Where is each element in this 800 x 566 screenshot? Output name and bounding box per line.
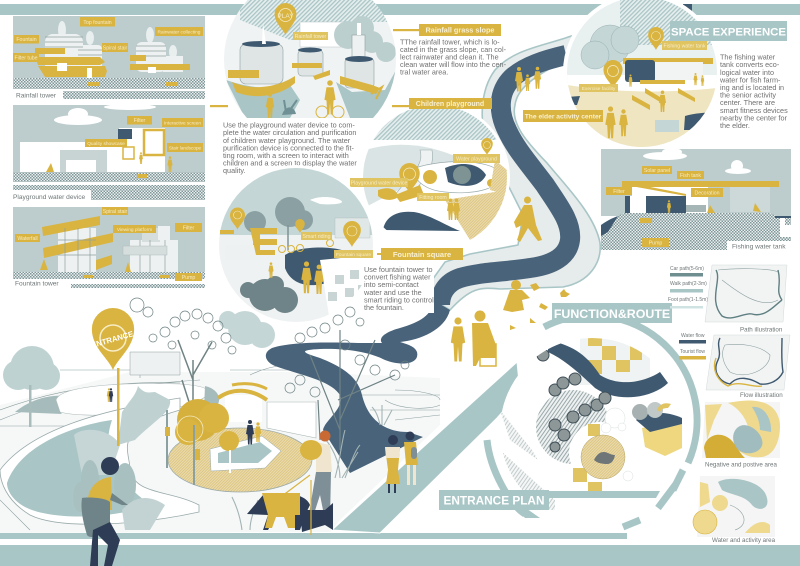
text: elder description: tank converts eco- xyxy=(720,60,780,69)
map: path illustration: Path illustration xyxy=(740,326,783,334)
text: fountain description: smart riding to control xyxy=(364,296,434,304)
label: Waterfall xyxy=(15,234,40,242)
woman with dogs xyxy=(247,430,333,535)
label: Fountain square: Fountain square xyxy=(336,252,371,258)
label: Filter: Filter xyxy=(183,226,195,232)
bottom banner xyxy=(0,533,800,566)
label: Water playground xyxy=(453,154,500,163)
label: The elder activity center xyxy=(523,110,603,122)
pond and curved rim xyxy=(0,398,199,524)
label: Viewing platform: Viewing platform xyxy=(117,227,152,233)
outer ring xyxy=(487,315,697,527)
map: negative and positive area xyxy=(702,400,780,468)
map: flow illustration xyxy=(706,335,790,399)
label: Water playground: Water playground xyxy=(456,156,497,162)
label: Filter: Filter xyxy=(134,118,146,124)
dark pond xyxy=(15,396,65,414)
text: elder description: center. There are xyxy=(720,98,775,107)
map: path illustration xyxy=(705,265,787,334)
heading: Fountain square: Fountain square xyxy=(393,250,451,259)
heading: SPACE EXPERIENCE: SPACE EXPERIENCE xyxy=(671,26,786,38)
label: Filter xyxy=(606,187,632,195)
label: Exercise facility: Exercise facility xyxy=(582,86,616,92)
label: Filter: Filter xyxy=(613,189,625,195)
panel: playground water device section xyxy=(13,104,205,201)
cloud xyxy=(54,104,156,125)
panel: fishing water tank section xyxy=(601,148,791,250)
text: fountain description: the fountain. xyxy=(364,303,404,312)
teal shrub xyxy=(74,430,120,475)
label: Solar panel: Solar panel xyxy=(644,168,670,174)
label: Decoration: Decoration xyxy=(694,190,720,196)
legend: flow types: Tourist flow xyxy=(680,349,705,355)
label: Spiral stair: Spiral stair xyxy=(103,209,128,215)
balloon middle xyxy=(295,219,305,233)
legend: path types xyxy=(668,266,708,308)
map: flow illustration: Flow illustration xyxy=(740,392,783,399)
label: Smart riding: Smart riding xyxy=(303,234,331,240)
PLAY balloon: PLAY xyxy=(277,13,294,20)
legend: path types: Car path(5-6m) xyxy=(670,266,704,272)
text: elder description: ing and is located in xyxy=(720,83,784,92)
label: Fountain xyxy=(14,35,39,44)
leaves near balloon xyxy=(118,386,170,445)
heading: Children playground: Children playground xyxy=(416,101,484,108)
text: elder description xyxy=(719,52,788,130)
map: water and activity area: Water and activity area xyxy=(712,537,776,544)
entrance balloon: ENTRANCE xyxy=(90,329,134,350)
stub line xyxy=(210,105,228,107)
heading: Rainfall grass slope xyxy=(393,24,501,36)
heading: FUNCTION&ROUTE: FUNCTION&ROUTE xyxy=(554,307,670,321)
tower drawing xyxy=(35,21,190,86)
caption: Rainfall tower xyxy=(16,92,57,100)
label: Filter tube xyxy=(13,53,39,62)
heading: ENTRANCE PLAN xyxy=(439,490,549,510)
text: elder description: nearby the center for xyxy=(720,114,787,122)
label: Fitting room: Fitting room xyxy=(419,195,447,201)
foreground man xyxy=(81,457,128,566)
label: Spiral stair xyxy=(102,43,128,52)
label: Fishing water tank xyxy=(662,41,707,50)
text: rainfall description: TThe rainfall tower, which is lo- xyxy=(400,38,500,46)
PLAY balloon xyxy=(275,3,296,35)
label: Exercise facility xyxy=(579,84,618,92)
fish balloon xyxy=(648,27,664,50)
text: playground description: purification device is connected to the fit- xyxy=(223,144,355,152)
panel: entrance plan xyxy=(439,315,697,527)
exercise balloon xyxy=(603,60,623,88)
label: Fishing water tank: Fishing water tank xyxy=(663,44,706,50)
heading: ENTRANCE PLAN: ENTRANCE PLAN xyxy=(444,493,544,507)
label: Stair landscope: Stair landscope xyxy=(169,146,202,150)
label: The elder activity center: The elder activity center xyxy=(525,114,602,120)
label: Top fountain: Top fountain xyxy=(83,20,112,26)
label: Spiral stair: Spiral stair xyxy=(103,46,128,52)
text: elder description: the senior activity xyxy=(720,90,776,100)
label: Fountain: Fountain xyxy=(16,37,37,43)
text: elder description: logical water into xyxy=(720,68,774,77)
panel: rainfall grass slope circle xyxy=(224,0,396,122)
text: elder description: water for fish farm- xyxy=(719,76,781,84)
label: Solar panel xyxy=(642,166,672,174)
label: Rainwater collecting xyxy=(155,27,203,36)
gold blobs and lamps xyxy=(165,399,239,485)
gold family group xyxy=(451,280,570,366)
balloon right xyxy=(343,221,361,247)
scene backdrop sketch xyxy=(0,352,440,533)
text: fountain description xyxy=(362,265,434,313)
navy bridge xyxy=(266,300,450,473)
text: playground description: of children water playground. The water xyxy=(223,136,351,145)
text: elder description: The fishing water xyxy=(720,52,776,62)
small balloon xyxy=(481,138,493,155)
label: Fish tank: Fish tank xyxy=(680,173,701,179)
balloon left xyxy=(230,208,245,230)
text: rainfall description: clean water will flow into the cen- xyxy=(400,60,507,69)
panel: rainfall tower section xyxy=(13,16,205,100)
map: water and activity area xyxy=(693,476,776,544)
mound hatch xyxy=(601,213,780,237)
text: rainfall description: cated in the grass slope, can col- xyxy=(400,45,507,54)
panel: children playground circle xyxy=(350,109,510,240)
label: Interactive screen: Interactive screen xyxy=(164,120,201,126)
label: Pump xyxy=(175,273,202,281)
label: Pump xyxy=(642,238,669,247)
label: Pump: Pump xyxy=(182,275,195,281)
label: Decoration xyxy=(691,188,723,197)
legend: path types: Foot path(1-1.5m) xyxy=(668,297,708,303)
label: Rainfall tower xyxy=(293,32,328,40)
top banner xyxy=(0,4,800,15)
text: fountain description: convert fishing water xyxy=(364,272,431,282)
label: Rainfall tower: Rainfall tower xyxy=(295,34,326,40)
panel: entrance scene xyxy=(0,298,520,566)
heading: FUNCTION&ROUTE xyxy=(552,303,672,323)
label: Fitting room xyxy=(417,193,449,201)
reed plants xyxy=(232,405,392,530)
legend: flow types xyxy=(679,333,706,360)
label stub xyxy=(220,230,234,234)
map: negative and positive area: Negative and postive area xyxy=(705,462,777,468)
label: Quality showcase xyxy=(85,139,127,147)
label: Top fountain xyxy=(80,17,115,26)
clouds xyxy=(643,148,751,174)
label: Viewing platform xyxy=(113,225,156,233)
text: rainfall description: lect rainwater and clean it. The xyxy=(400,52,499,62)
teal trees xyxy=(3,311,275,427)
foreground leaves xyxy=(73,460,165,530)
text: fountain description: into semi-contact xyxy=(364,280,419,289)
plan spoke xyxy=(549,491,660,498)
plan contents xyxy=(500,336,684,522)
label: Playground water device xyxy=(350,178,408,187)
label: Rainwater collecting: Rainwater collecting xyxy=(158,30,201,36)
text: rainfall description: tral water area. xyxy=(400,68,448,76)
text: fountain description: Use fountain tower to xyxy=(364,265,433,274)
building xyxy=(20,128,173,178)
text: playground description: children and a screen to display the water xyxy=(223,158,357,168)
caption: Fishing water tank xyxy=(732,244,786,250)
caption xyxy=(13,279,71,288)
label: Pump: Pump xyxy=(649,240,662,246)
caption: Playground water device xyxy=(13,194,86,201)
text: playground description: quality. xyxy=(223,166,245,175)
tank building xyxy=(622,181,779,216)
label: Playground water device: Playground water device xyxy=(351,180,408,186)
text: playground description: Use the playground water device to com- xyxy=(223,120,355,130)
text: rainfall description xyxy=(400,38,507,76)
heading: Rainfall grass slope: Rainfall grass slope xyxy=(426,25,494,34)
text: playground description: ting room, with a screen to interact with xyxy=(223,151,349,160)
label: Filter tube: Filter tube xyxy=(14,56,38,62)
outline tree xyxy=(130,298,236,405)
label: Stair landscope xyxy=(167,143,203,152)
gold arch xyxy=(218,384,267,400)
bridge tree outlines xyxy=(285,307,409,450)
plaza disc xyxy=(168,428,312,492)
pair on plaza xyxy=(246,420,261,444)
text: playground description xyxy=(223,120,357,175)
label: Waterfall: Waterfall xyxy=(17,236,38,242)
walking couple xyxy=(385,432,418,493)
label: Filter xyxy=(127,116,152,124)
legend: flow types: Water flow xyxy=(681,333,705,339)
legend: path types: Walk path(2-3m) xyxy=(670,281,707,287)
text: elder description: smart fitness devices xyxy=(720,106,788,115)
text: fountain description: water and use the xyxy=(363,288,422,297)
heading: Children playground xyxy=(392,98,492,109)
label: Fountain square xyxy=(334,250,373,258)
panel: fountain tower section xyxy=(13,207,205,288)
heading: SPACE EXPERIENCE xyxy=(670,21,787,41)
entrance balloon xyxy=(90,308,134,446)
small couple xyxy=(107,388,113,402)
text: elder description: the elder. xyxy=(720,121,750,130)
caption: Fountain tower xyxy=(15,280,59,288)
text: playground description: plete the water circulation and purification xyxy=(223,128,356,137)
panel: fountain square circle xyxy=(216,165,376,325)
heading: Fountain square xyxy=(377,248,463,260)
label: Interactive screen xyxy=(162,118,203,127)
teal walkway xyxy=(332,362,520,533)
gold figures on road xyxy=(514,67,542,242)
panel: elder activity circle xyxy=(563,0,721,151)
label: Filter xyxy=(175,223,202,232)
tower drawing xyxy=(40,216,178,278)
label: Quality showcase: Quality showcase xyxy=(87,141,125,147)
label: Fish tank xyxy=(677,171,704,179)
label: Smart riding xyxy=(301,232,332,240)
road and river xyxy=(425,35,600,310)
play balloon xyxy=(399,163,420,193)
